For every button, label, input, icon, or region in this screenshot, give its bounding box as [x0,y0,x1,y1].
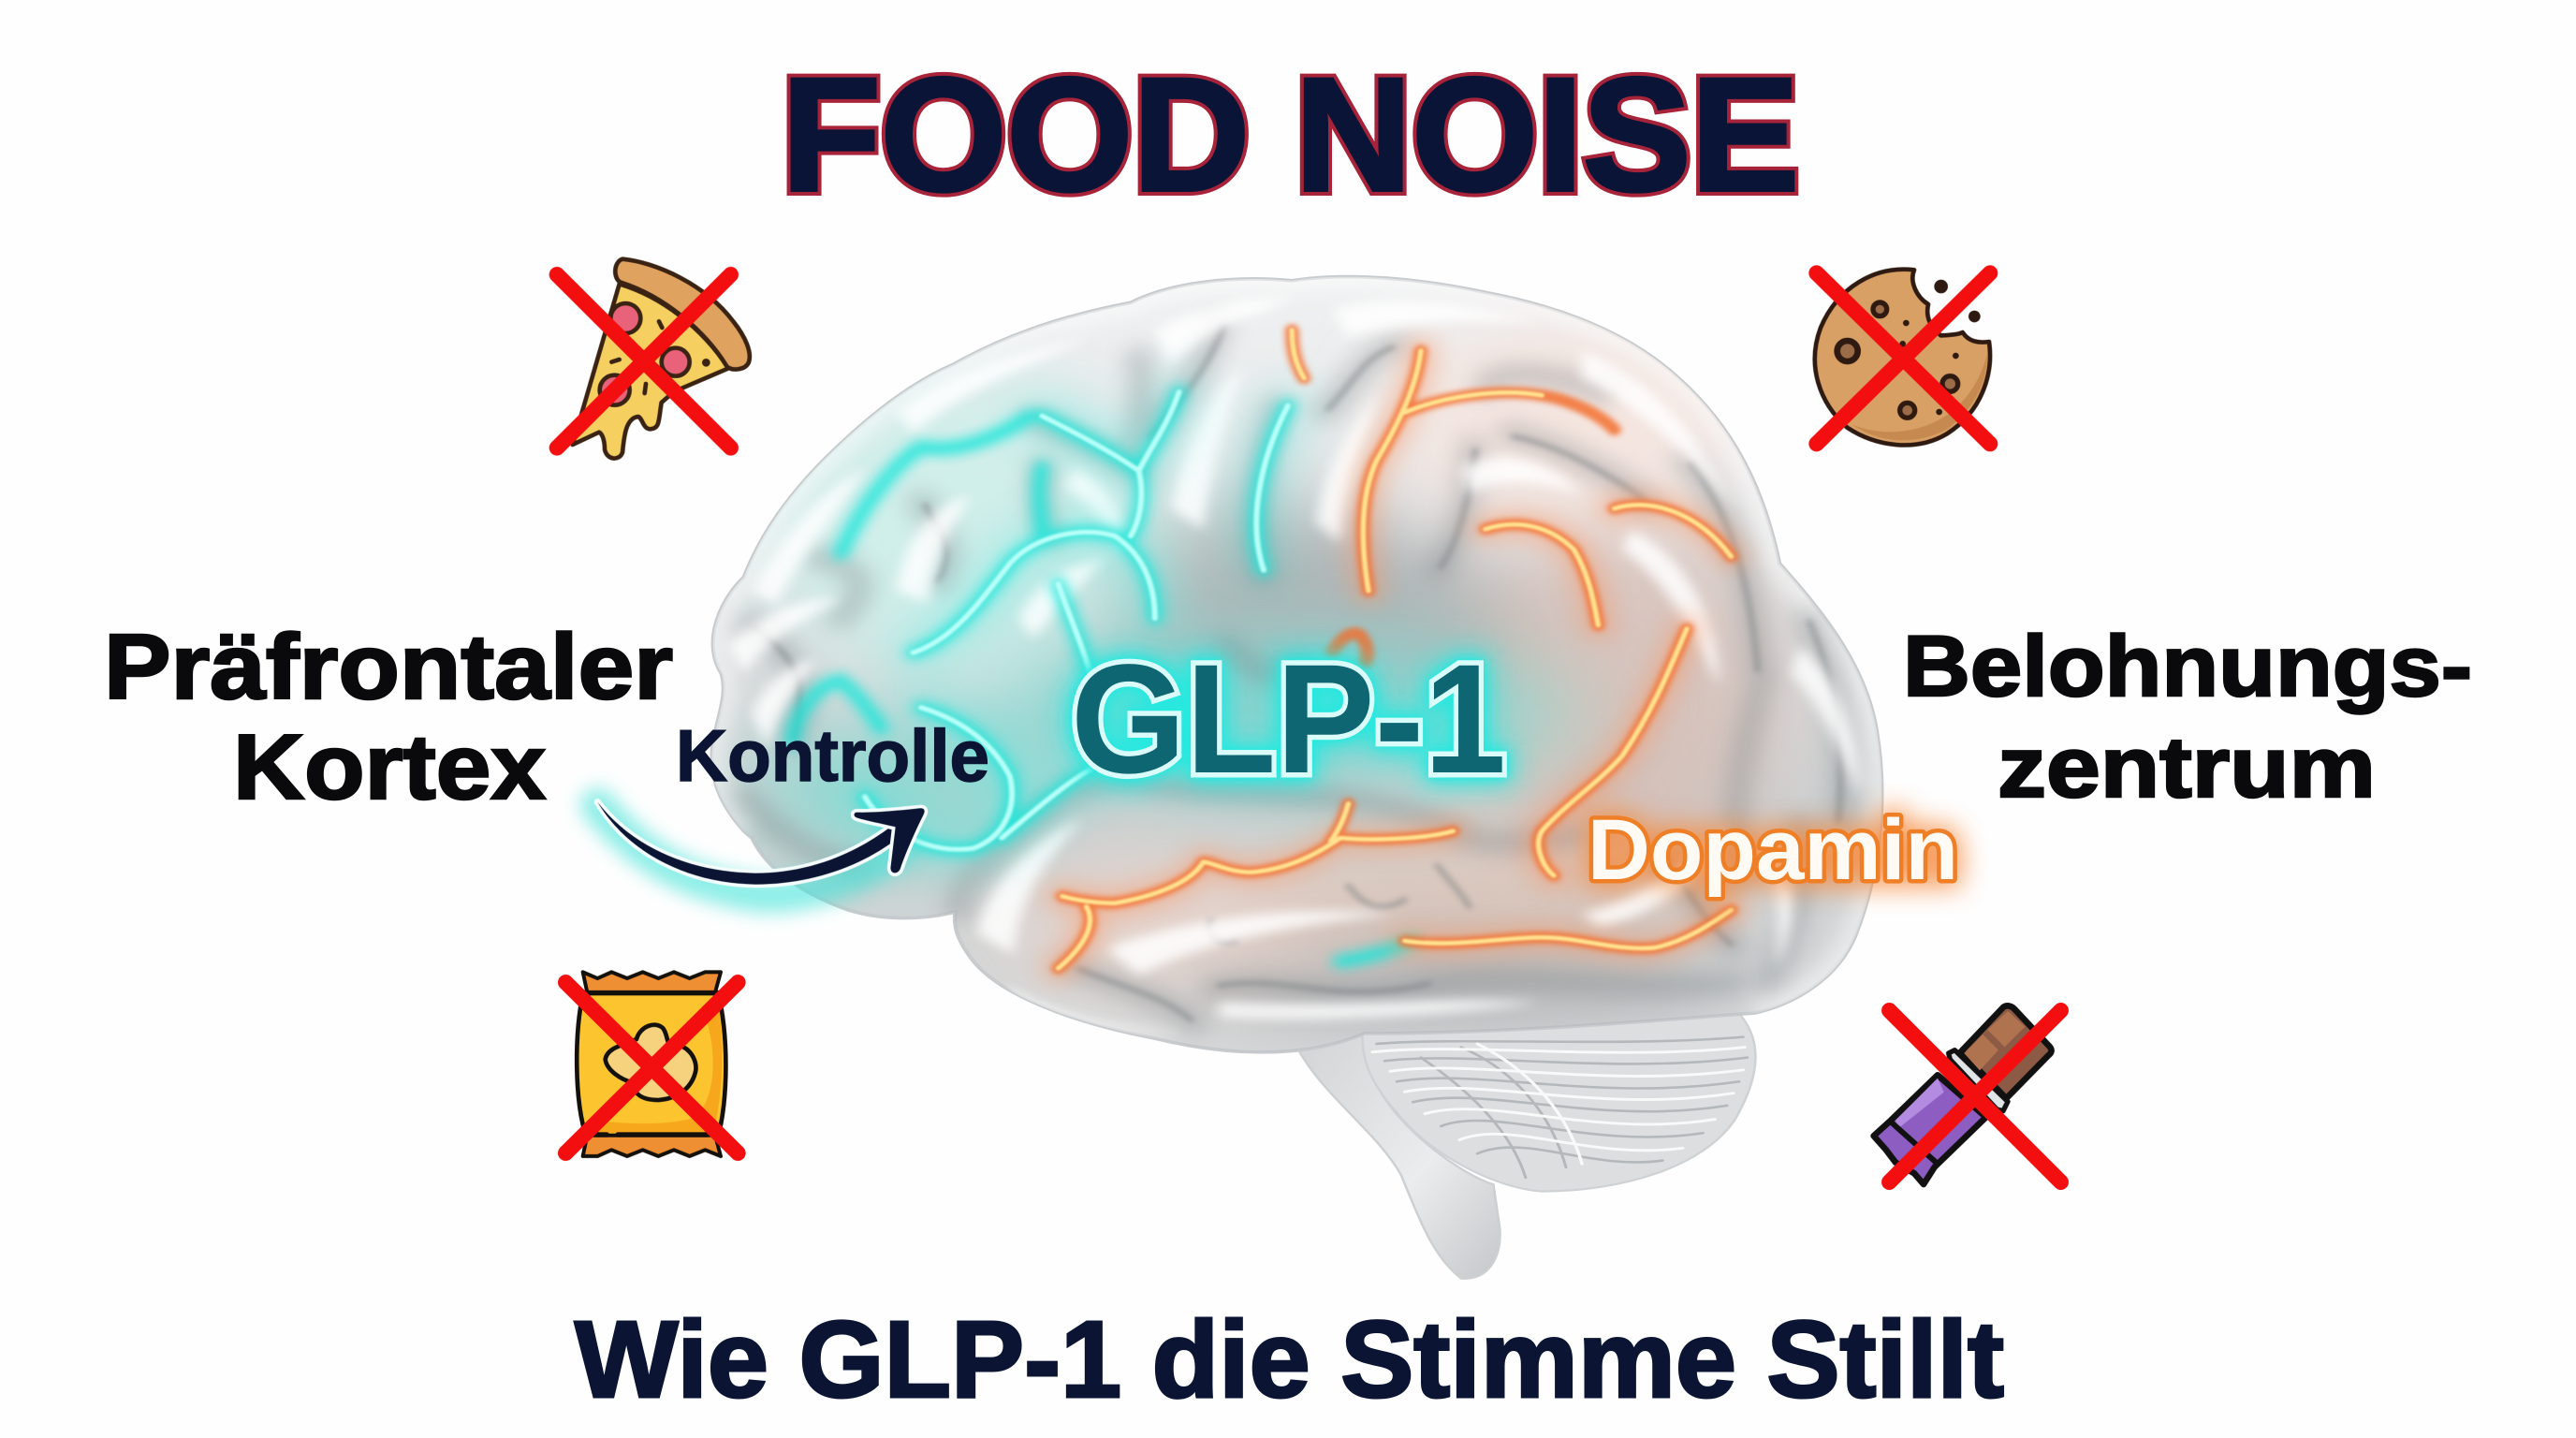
red cross [1889,1010,2061,1182]
icon: crossed-out pizza [557,259,750,459]
cookie [1815,270,1990,445]
label: Dopamin: Dopamin [1588,802,1958,898]
chips bag [577,972,725,1156]
red cross [557,274,731,448]
icon: cerebellum [1362,1008,1755,1192]
red cross [1817,273,1990,444]
icon: crossed-out chocolate bar [1874,1005,2061,1184]
heading: Belohnungszentrum [1903,619,2472,815]
icon: crossed-out chips bag [565,972,738,1156]
label: GLP-1: GLP-1 [1071,633,1506,806]
heading: Belohnungszentrum: Belohnungs- [1903,619,2472,714]
brain surface shading and folds [712,277,1881,1034]
heading: Belohnungszentrum: zentrum [1998,720,2376,815]
arrow: control curve [597,802,925,896]
icon: crossed-out cookie [1815,270,1990,445]
pizza slice [573,259,750,459]
edge sheen [712,277,1881,1013]
label: GLP-1: GLP-1 [1071,633,1506,806]
subtitle: Wie GLP-1 die Stimme Stillt [575,1299,2004,1420]
brain illustration [712,277,1881,1279]
label: Dopamin: Dopamin [1588,802,1958,898]
icon: cerebrum body [712,277,1881,1052]
label: GLP-1: GLP-1 [1071,633,1506,806]
heading: Präfrontaler Kortex: Präfrontaler [104,615,673,718]
cyan glow pathways [792,392,1412,961]
heading: Präfrontaler Kortex [104,615,673,818]
title: FOOD NOISE [782,45,1799,225]
glossy highlights [727,299,1860,1034]
chocolate bar [1874,1005,2052,1184]
red cross [565,982,738,1153]
title: FOOD NOISE [782,45,1799,225]
orange dopamine pathways [1058,330,1731,968]
icon: brain stem [1292,1023,1500,1279]
heading: Präfrontaler Kortex: Kortex [233,715,546,818]
label: Kontrolle: Kontrolle [676,714,989,797]
